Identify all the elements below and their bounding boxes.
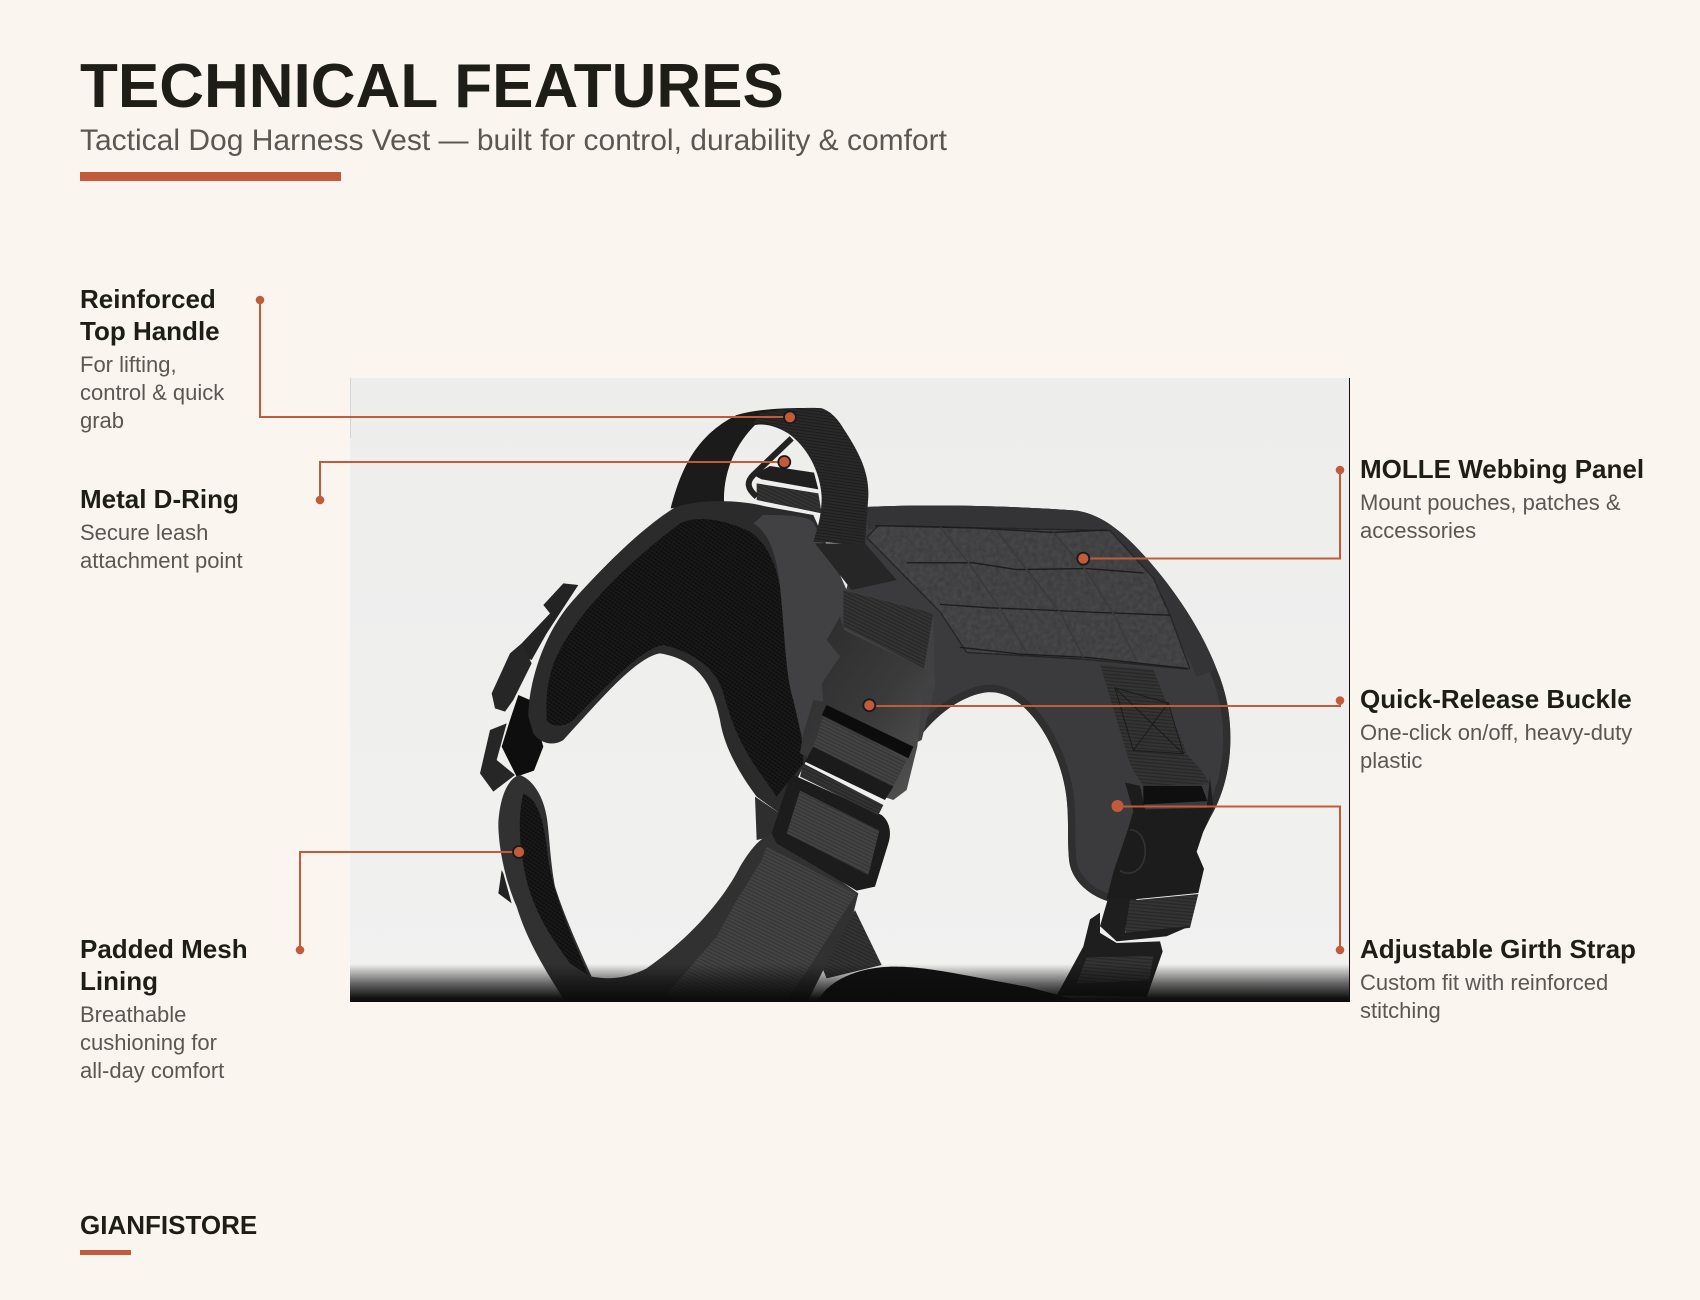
- back panel with MOLLE webbing: [833, 497, 1250, 997]
- slider webbing: [787, 791, 879, 875]
- mesh on loop: [520, 793, 588, 975]
- slider webbing: [1077, 956, 1153, 984]
- callout: reinforced top handle: control & quick: [80, 380, 225, 405]
- top strap: [843, 590, 933, 668]
- MOLLE panel: [867, 526, 1190, 669]
- upper side clip: [515, 583, 578, 660]
- loop padding: [498, 775, 858, 1003]
- footer brand: GIANFISTORE: [80, 1210, 257, 1240]
- lower girth webbing: [1125, 894, 1198, 935]
- lower side slider: [480, 723, 515, 792]
- callout: reinforced top handle: Reinforced: [80, 284, 216, 314]
- buckle body: [800, 617, 933, 800]
- outer padded rim: [528, 501, 847, 813]
- lower bar: [805, 747, 893, 800]
- girth buckle: [1107, 777, 1213, 901]
- strap box stitching: [1115, 688, 1183, 754]
- callout: adjustable girth strap: Adjustable Girth Strap: [1360, 934, 1636, 964]
- D-ring bar: [753, 466, 818, 489]
- D-ring webbing: [757, 483, 822, 513]
- callout: metal D-ring: attachment point: [80, 548, 243, 573]
- callout: MOLLE webbing panel: accessories: [1360, 518, 1476, 543]
- handle back loop: [671, 408, 843, 508]
- callout: adjustable girth strap: Custom fit with reinforced: [1360, 970, 1608, 995]
- side buckle: [492, 643, 532, 712]
- callout: MOLLE webbing panel: MOLLE Webbing Panel: [1360, 454, 1644, 484]
- padded back panel: [846, 506, 1230, 901]
- side mesh strap: [502, 695, 543, 777]
- front padded panel with mesh lining: [528, 408, 935, 813]
- chest strap slider: [772, 775, 890, 891]
- buckle black band: [822, 705, 913, 758]
- callout: padded mesh lining: cushioning for: [80, 1030, 217, 1055]
- callout: metal D-ring: Metal D-Ring: [80, 484, 239, 514]
- callout: padded mesh lining: Breathable: [80, 1002, 186, 1027]
- handle tab: [815, 543, 897, 590]
- chest quick-release buckle: [800, 543, 933, 815]
- callout: reinforced top handle: grab: [80, 408, 124, 433]
- callout: metal D-ring: Secure leash: [80, 520, 208, 545]
- chest webbing: [678, 848, 856, 982]
- callout: padded mesh lining: [80, 846, 525, 1083]
- lower girth slider: [1057, 913, 1163, 997]
- callout: quick-release buckle: Quick-Release Buckle: [1360, 684, 1632, 714]
- small side tab: [498, 870, 512, 903]
- lower buckle frame: [1100, 897, 1190, 941]
- callout: MOLLE webbing panel: [1077, 454, 1644, 565]
- image right edge: [1349, 378, 1350, 1002]
- callout: MOLLE webbing panel: Mount pouches, patches &: [1360, 490, 1621, 515]
- MOLLE seams: [875, 526, 1188, 669]
- lower chest loop: [498, 775, 858, 1003]
- subtitle: Tactical Dog Harness Vest — built for control, durability & comfort: [80, 124, 948, 157]
- callout: quick-release buckle: One-click on/off, heavy-duty: [1360, 720, 1632, 745]
- callout: reinforced top handle: Top Handle: [80, 316, 220, 346]
- outer fabric side: [753, 515, 935, 753]
- callout: reinforced top handle: For lifting,: [80, 352, 177, 377]
- buckle webbing: [813, 717, 907, 787]
- callout: padded mesh lining: all-day comfort: [80, 1058, 224, 1083]
- callout: padded mesh lining: Padded Mesh: [80, 934, 248, 964]
- back vertical strap: [1100, 664, 1210, 786]
- callout: quick-release buckle: plastic: [1360, 748, 1422, 773]
- buckle side clip: [1120, 830, 1145, 873]
- callout: quick-release buckle: [863, 684, 1632, 773]
- product image: harness vest: [350, 378, 1350, 1003]
- callout: adjustable girth strap: [1112, 800, 1636, 1023]
- footer accent bar: [80, 1250, 131, 1255]
- D-ring metal: [749, 438, 792, 497]
- callout: metal D-ring: [80, 456, 790, 573]
- top handle and D-ring: [671, 408, 843, 513]
- bottom shadow fade: [350, 964, 1350, 1002]
- title: TECHNICAL FEATURES: [80, 52, 784, 121]
- mesh lining: [546, 519, 803, 797]
- strap under buckle: [800, 763, 883, 815]
- callout: adjustable girth strap: stitching: [1360, 998, 1441, 1023]
- buckle window: [1143, 786, 1207, 804]
- title accent bar: [80, 172, 341, 181]
- rear straps behind harness: [755, 797, 1077, 1003]
- callout: padded mesh lining: Lining: [80, 966, 158, 996]
- handle front band: [753, 408, 868, 545]
- image left edge: [350, 378, 351, 438]
- callout: reinforced top handle: [80, 284, 796, 433]
- left side buckle and straps: [480, 583, 578, 792]
- image background: [350, 378, 1350, 1002]
